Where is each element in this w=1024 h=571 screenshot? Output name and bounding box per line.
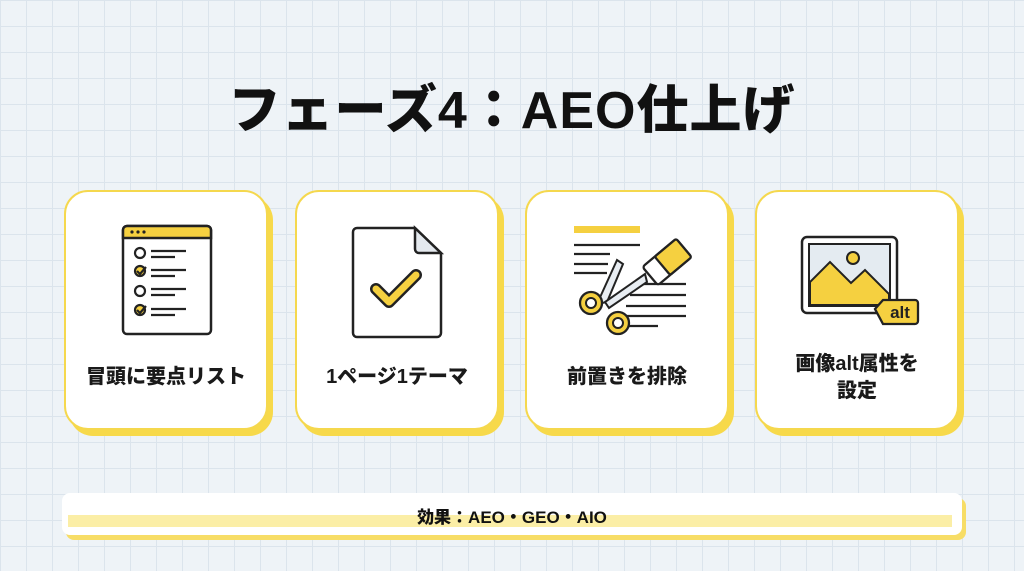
card: checklist: [64, 190, 268, 430]
icon: document check: [352, 225, 444, 338]
icon: scissors and eraser: [574, 226, 692, 336]
label: 1ページ1テーマ: [326, 366, 468, 388]
label: 冒頭に要点リスト: [86, 366, 246, 388]
icon: checklist: [122, 224, 212, 336]
label: 画像alt属性を: [795, 353, 919, 375]
card: document: [295, 190, 499, 430]
icon: image with alt tag: [800, 236, 920, 326]
label: [795, 352, 919, 402]
icon: image with alt tag: alt: [890, 303, 910, 322]
effect bar: [62, 493, 962, 535]
title: フェーズ4：AEO仕上げ: [228, 82, 796, 140]
card: scissors: [525, 190, 729, 430]
card: image alt: [755, 190, 959, 430]
label: 設定: [837, 380, 877, 402]
effect text: 効果：AEO・GEO・AIO: [417, 508, 607, 527]
label: 前置きを排除: [567, 366, 687, 388]
